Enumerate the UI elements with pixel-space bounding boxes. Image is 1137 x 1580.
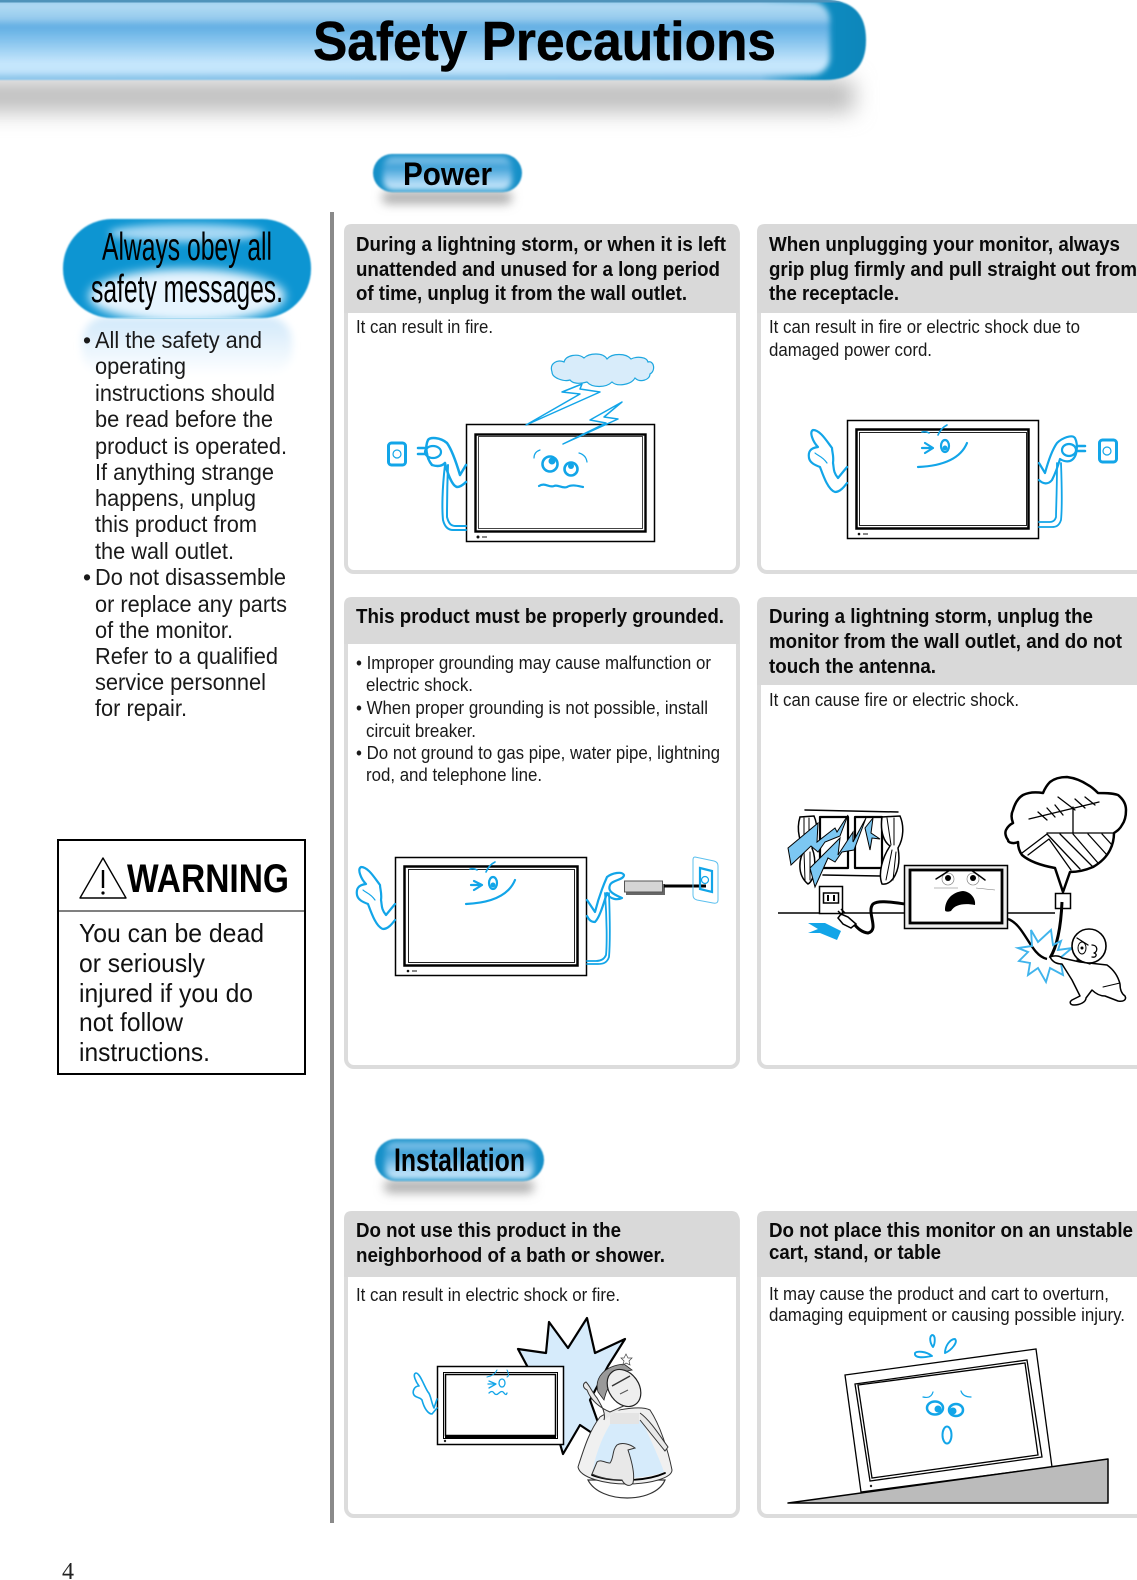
panel body text: It can result in fire or electric shock due to [769, 317, 1080, 337]
warning text: not follow [79, 1007, 183, 1037]
panel heading [769, 234, 1137, 305]
burst [518, 1318, 625, 1454]
panel body text: damaging equipment or causing possible injury. [769, 1305, 1125, 1325]
panel heading: unattended and unused for a long period [356, 259, 720, 281]
wall outlet and floor [778, 886, 1055, 914]
monitor [413, 1366, 564, 1444]
thought bubble with antenna [1005, 777, 1126, 892]
illustration: monitor beside bathtub [413, 1318, 672, 1498]
warning text: injured if you do [79, 978, 253, 1008]
panel bullet list: rod, and telephone line. [366, 765, 542, 785]
title banner [0, 0, 910, 112]
illustration: monitor in storm unplugged [388, 354, 654, 542]
panel heading [769, 606, 1122, 678]
sidebar bullet text: this product from [95, 511, 257, 537]
panel body text: It can cause fire or electric shock. [769, 690, 1019, 710]
crawling child [1050, 929, 1126, 1005]
panel heading: During a lightning storm, or when it is left [356, 234, 726, 256]
panel: lightning storm unplug [344, 224, 739, 572]
panel: unplugging grip [757, 224, 1137, 572]
sidebar bullet text: • [83, 564, 91, 590]
sidebar bullet text: instructions should [95, 380, 275, 406]
sidebar bullet text: be read before the [95, 406, 273, 432]
sidebar bullet text: • [83, 327, 91, 353]
illustration: storm window, monitor, child, antenna [778, 777, 1126, 1005]
panel: lightning antenna [757, 597, 1137, 1067]
illustration: tilted monitor on wedge [788, 1335, 1108, 1503]
panel heading: When unplugging your monitor, always [769, 234, 1120, 256]
panel: unstable cart [757, 1211, 1137, 1516]
section pill: Power [373, 154, 522, 204]
warning heading: WARNING [127, 857, 289, 901]
section pill: Installation: Installation [394, 1142, 525, 1178]
panel heading: monitor from the wall outlet, and do not [769, 631, 1122, 653]
sidebar bullet text: operating [95, 353, 186, 379]
warning text: You can be dead [79, 918, 264, 948]
sidebar bullet text: the wall outlet. [95, 538, 234, 564]
column divider [330, 212, 334, 1523]
sidebar bullet text: If anything strange [95, 459, 274, 485]
lightning bolts [788, 815, 880, 887]
unplugged cord and arrow [808, 902, 905, 940]
illustration: monitor with grounded plug [357, 857, 718, 976]
scared monitor [904, 866, 1008, 928]
sidebar heading: always obey: Always obey all [102, 226, 272, 269]
panel heading: During a lightning storm, unplug the [769, 606, 1093, 628]
panel heading: neighborhood of a bath or shower. [356, 1245, 665, 1267]
sidebar bullet text: product is operated. [95, 433, 287, 459]
antenna wall socket and wire [1008, 894, 1070, 959]
warning text: instructions. [79, 1037, 210, 1067]
panel body text: damaged power cord. [769, 340, 932, 360]
panel: grounding [344, 597, 739, 1067]
panel heading: the receptacle. [769, 283, 899, 305]
panel body text: It can result in fire. [356, 317, 493, 337]
sidebar bullet text: or replace any parts [95, 591, 287, 617]
panel heading: Do not use this product in the [356, 1220, 621, 1242]
sidebar bullet text: All the safety and [95, 327, 262, 353]
section pill: Power: Power [403, 156, 492, 192]
sidebar bullet text: of the monitor. [95, 617, 233, 643]
electric burst [1018, 930, 1072, 982]
panel bullet list: • Do not ground to gas pipe, water pipe, lightning [356, 743, 720, 763]
panel: bath or shower [344, 1211, 739, 1516]
warning text [79, 918, 264, 1067]
sidebar heading: always obey: safety messages. [91, 268, 283, 311]
panel heading: touch the antenna. [769, 656, 936, 678]
panel bullet list: electric shock. [366, 675, 473, 695]
icon: warning triangle [80, 858, 126, 898]
panel bullet list: • When proper grounding is not possible, install [356, 698, 708, 718]
warning box [58, 840, 305, 1074]
sidebar bullet text: for repair. [95, 695, 187, 721]
panel heading [356, 234, 726, 305]
sidebar heading: always obey [63, 219, 311, 375]
sidebar bullet text: service personnel [95, 669, 266, 695]
panel heading [356, 1220, 665, 1267]
warning text: or seriously [79, 948, 205, 978]
section pill: Installation [375, 1139, 544, 1193]
panel body text: It can result in electric shock or fire. [356, 1285, 620, 1305]
panel bullet list: • Improper grounding may cause malfunction or [356, 653, 711, 673]
panel body text: It may cause the product and cart to overturn, [769, 1284, 1109, 1304]
panel body text [769, 317, 1080, 360]
panel heading: of time, unplug it from the wall outlet. [356, 283, 687, 305]
person in bathtub [578, 1354, 672, 1498]
sidebar bullet text: Do not disassemble [95, 564, 286, 590]
panel heading: This product must be properly grounded. [356, 606, 724, 628]
illustration: monitor pulling plug [809, 420, 1116, 538]
window with curtains [798, 810, 903, 884]
title text: Safety Precautions [313, 10, 776, 72]
panel bullet list: circuit breaker. [366, 721, 476, 741]
sidebar bullet text: happens, unplug [95, 485, 256, 511]
panel body text [769, 1284, 1125, 1325]
panel heading: cart, stand, or table [769, 1242, 941, 1264]
sidebar bullet text: Refer to a qualified [95, 643, 278, 669]
panel heading [769, 1220, 1133, 1264]
panel bullet list [356, 653, 720, 785]
sidebar bullet text [83, 327, 287, 721]
